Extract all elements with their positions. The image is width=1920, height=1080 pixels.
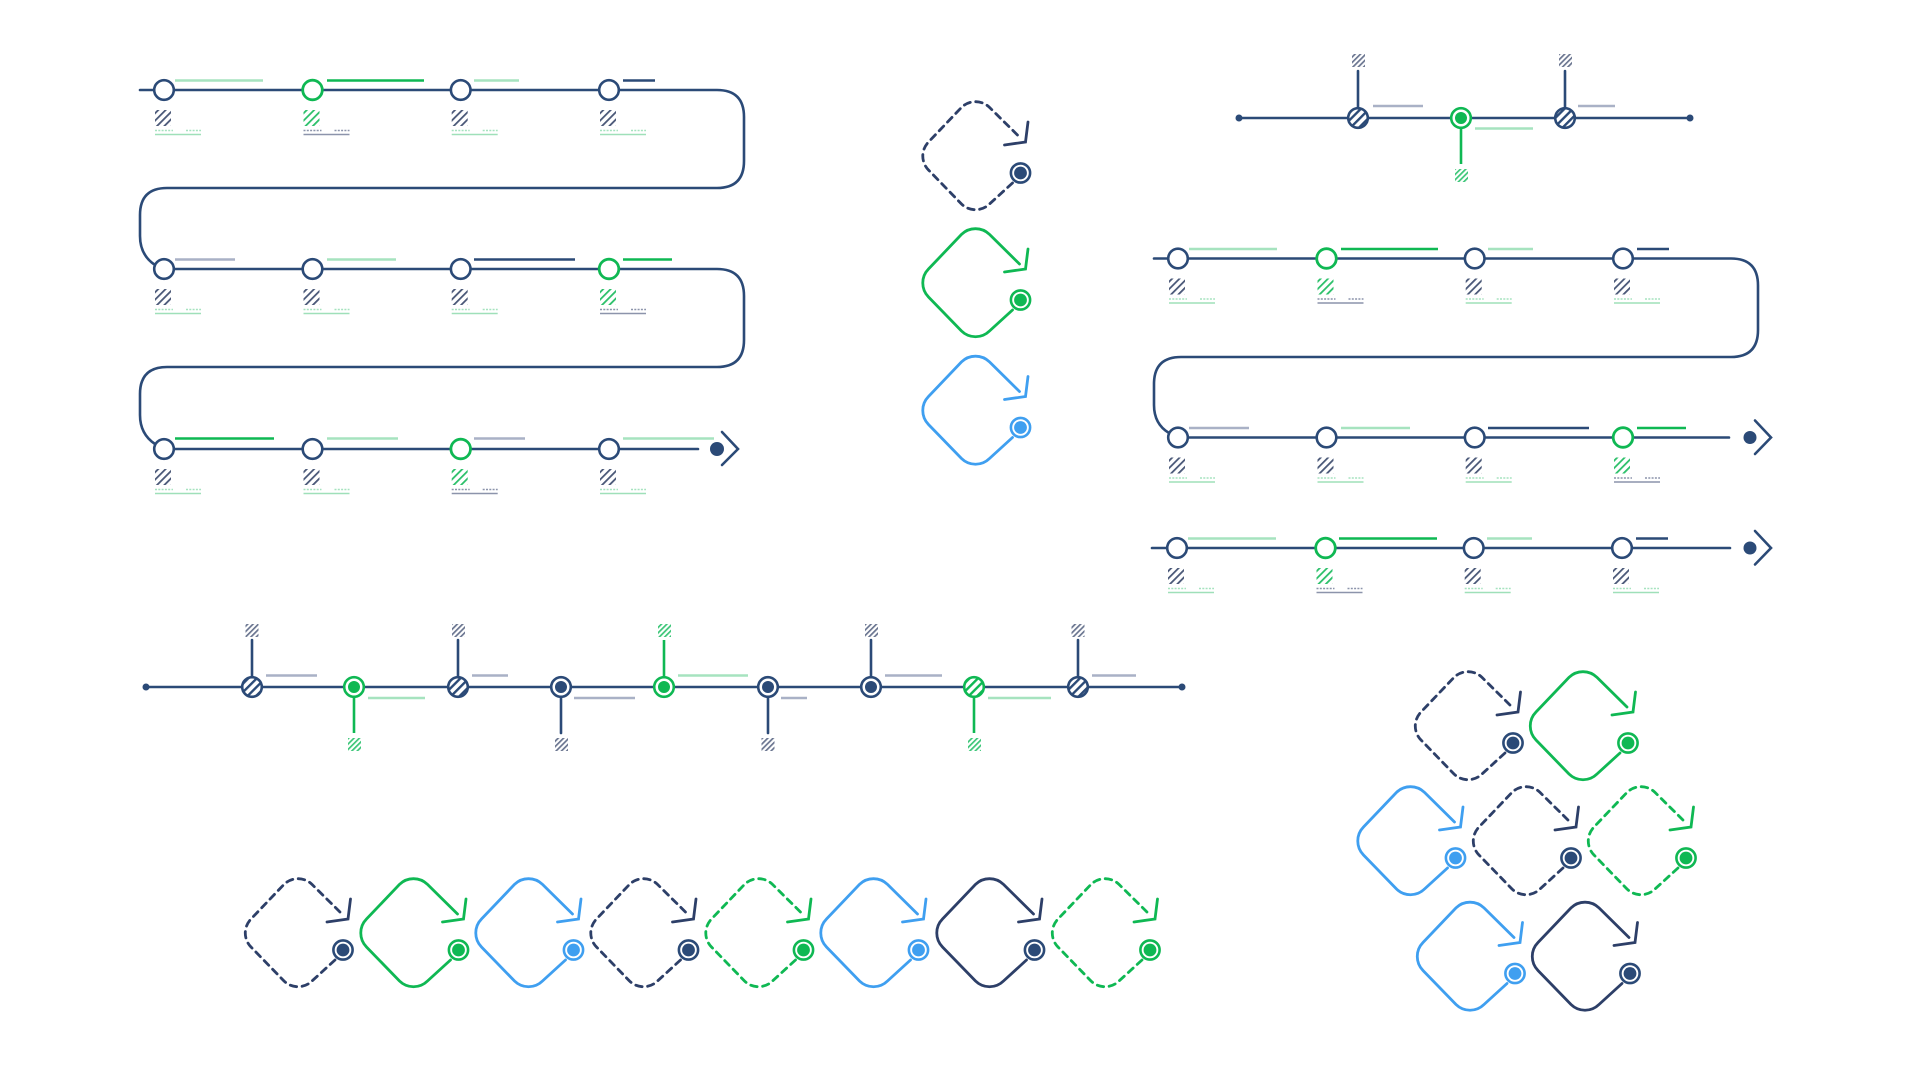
node 7 <box>861 624 942 697</box>
loop: blue <box>923 356 1030 464</box>
node 1 <box>1348 54 1423 128</box>
loop: blue <box>821 879 928 987</box>
node 3 <box>448 624 508 697</box>
connector path <box>140 90 744 449</box>
arrow end <box>1744 420 1771 454</box>
loop: navy dashed <box>1415 672 1523 780</box>
loop: blue <box>476 879 583 987</box>
loop: navy dashed <box>591 879 698 987</box>
connector path <box>1154 258 1758 438</box>
node 2 <box>344 677 425 751</box>
node 3 <box>1555 54 1615 128</box>
loop: green <box>1530 672 1638 780</box>
row 2 <box>1168 428 1686 482</box>
row 3 <box>154 438 714 494</box>
line <box>1152 547 1730 549</box>
node 2 <box>1451 108 1533 182</box>
loop: blue <box>1417 902 1525 1010</box>
row 1 <box>154 80 655 134</box>
loop: green <box>361 879 468 987</box>
loop: navy dashed <box>1473 787 1581 895</box>
arrow end <box>1744 531 1771 564</box>
node 9 <box>1068 624 1136 697</box>
axis <box>1239 117 1690 119</box>
loop: navy <box>1532 902 1640 1010</box>
loop icons: centre column <box>923 102 1030 464</box>
node 5 <box>654 624 748 697</box>
loop: blue <box>1358 787 1465 895</box>
loop: navy dashed <box>923 102 1030 210</box>
branching timeline: top right <box>1236 54 1694 182</box>
loop icons: right cluster <box>1358 672 1696 1010</box>
loop: green dashed <box>706 879 813 987</box>
arrow end <box>710 432 738 465</box>
branching timeline: bottom <box>142 624 1186 751</box>
row 2 <box>154 259 672 314</box>
loop icons: bottom row <box>245 879 1160 987</box>
row 1 <box>1168 249 1669 303</box>
loop: green <box>923 229 1030 337</box>
loop: navy dashed <box>245 879 353 987</box>
node 8 <box>964 677 1051 751</box>
loop: navy <box>937 879 1044 987</box>
serpentine timeline: right <box>1154 249 1771 482</box>
serpentine timeline: top left <box>140 80 744 493</box>
node 1 <box>242 624 317 697</box>
loop: green dashed <box>1588 787 1696 895</box>
axis <box>146 686 1182 688</box>
nodes and labels <box>1167 538 1668 592</box>
loop: green dashed <box>1052 879 1160 987</box>
node 4 <box>551 677 635 751</box>
single-row timeline: right <box>1152 531 1771 592</box>
node 6 <box>758 677 807 751</box>
